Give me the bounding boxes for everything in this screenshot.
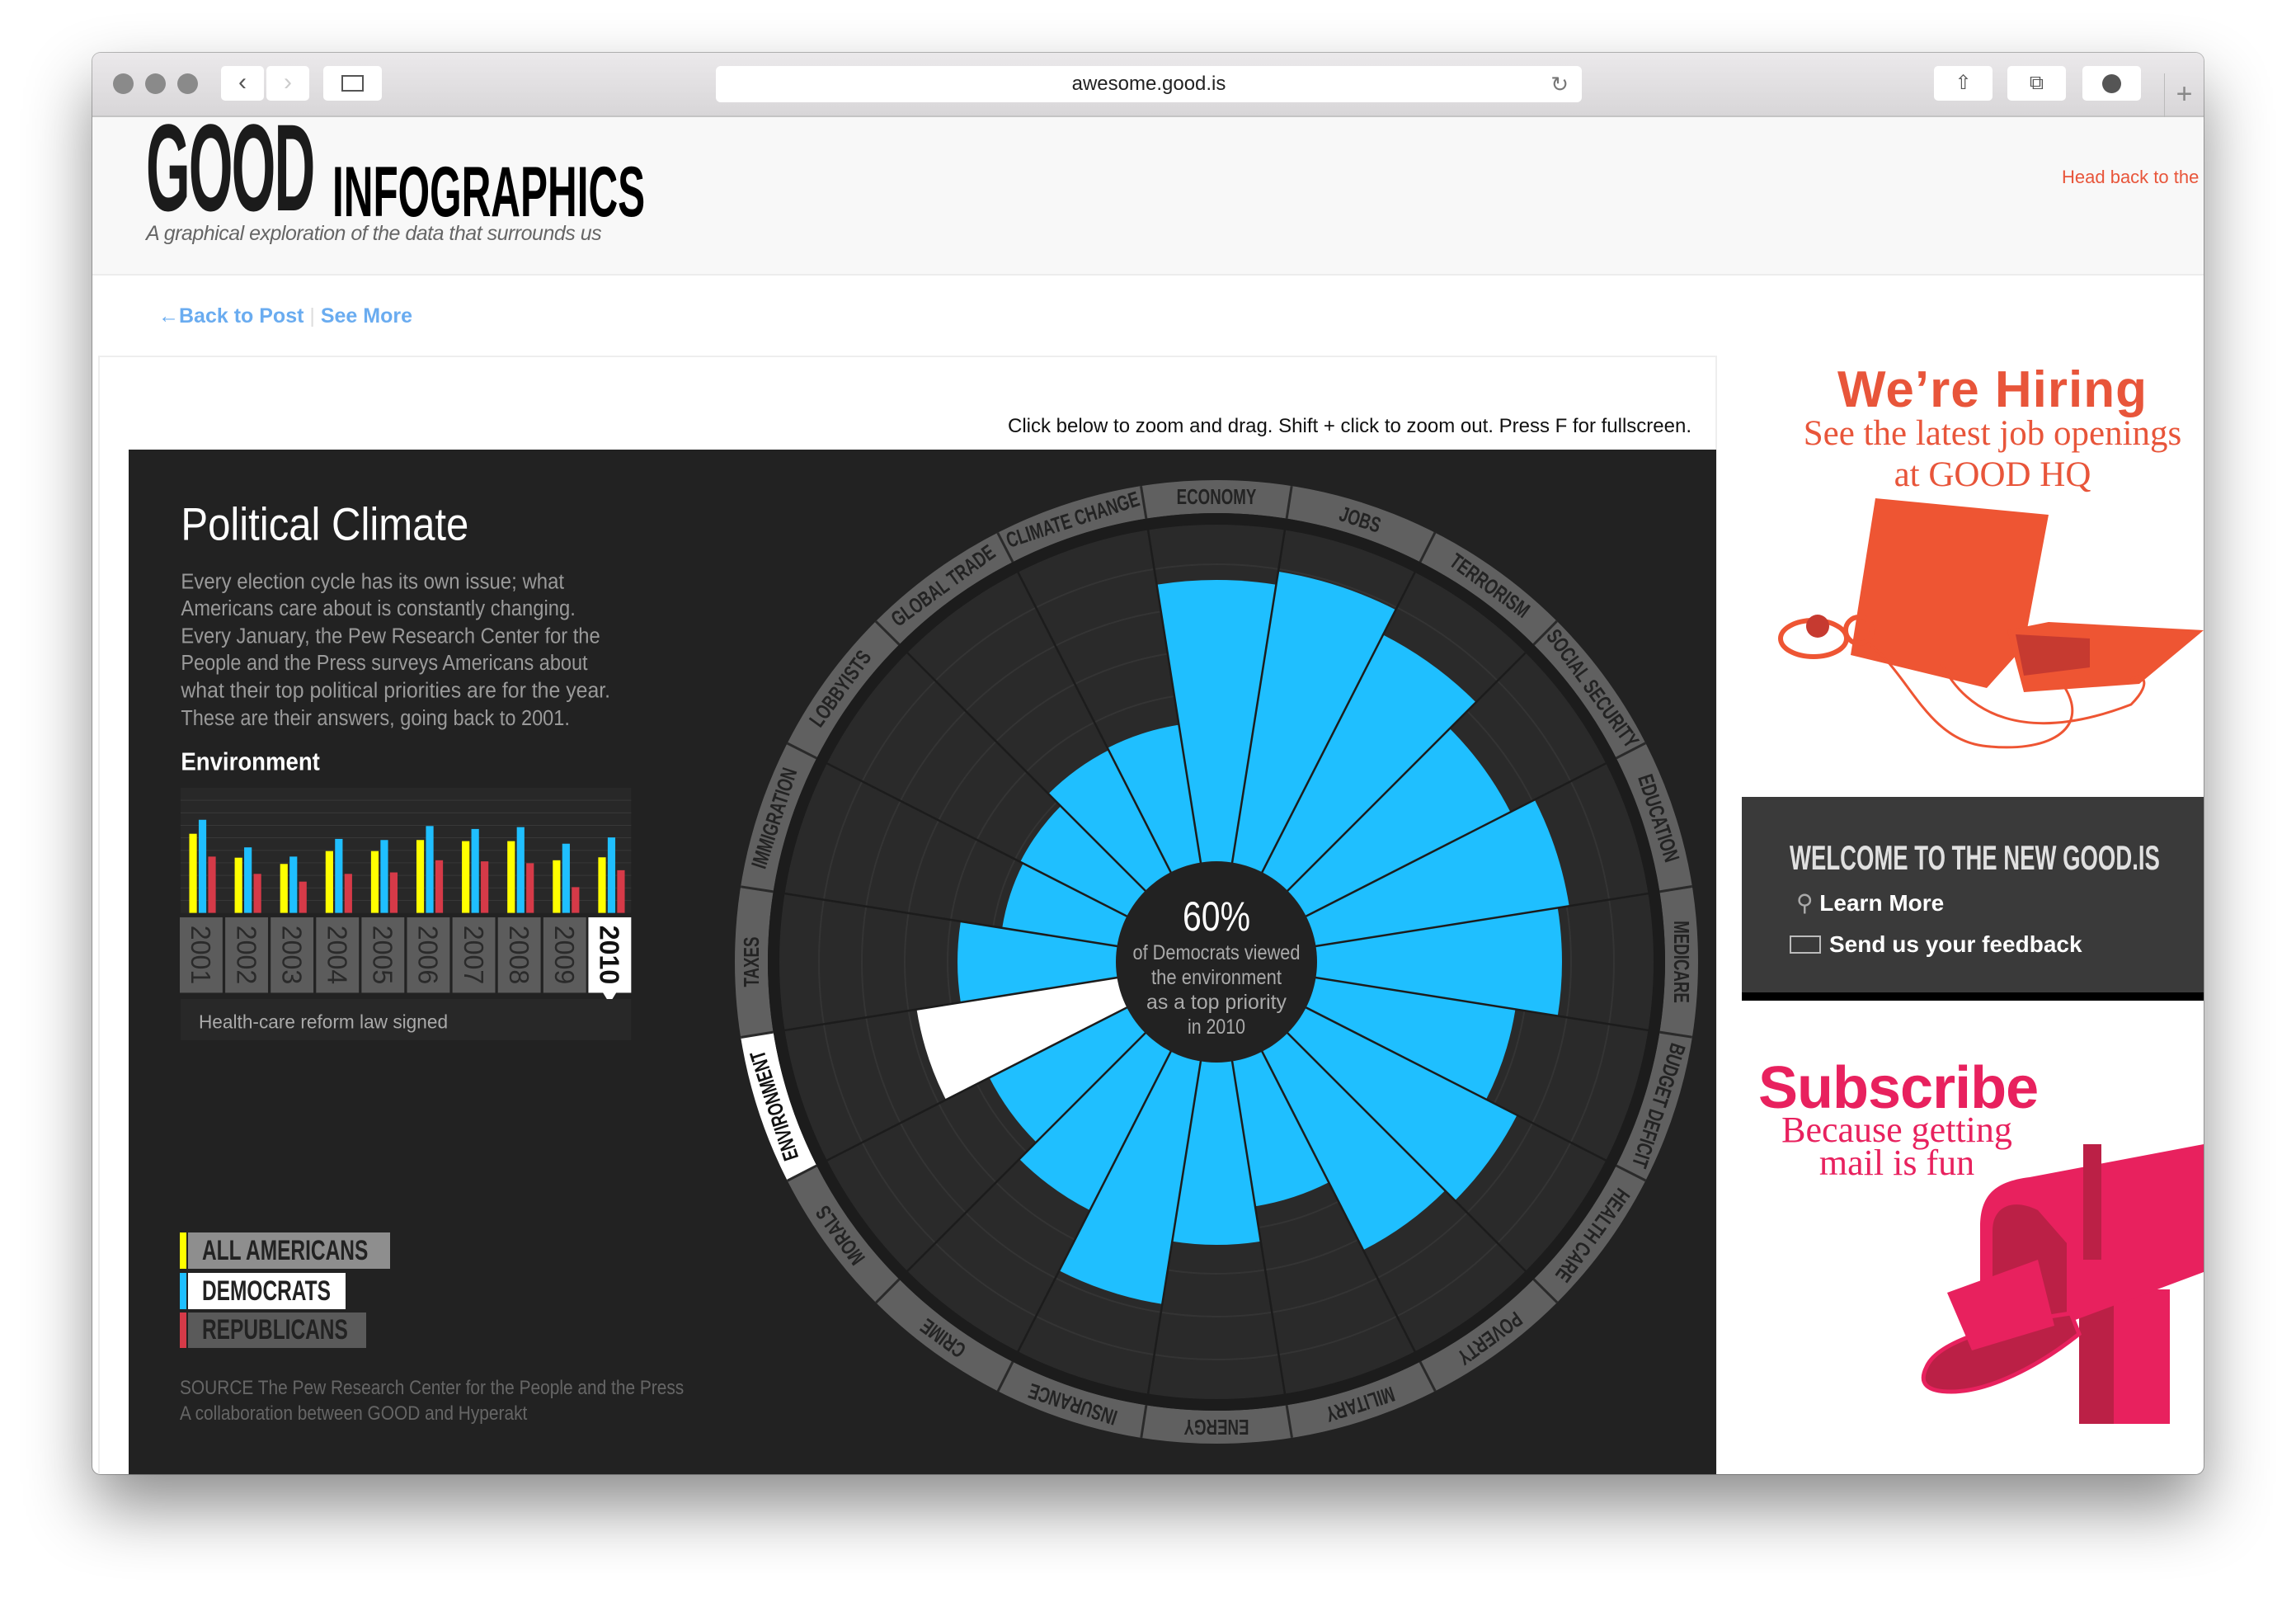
year tabs: 2009 (549, 926, 580, 984)
hiring heading: We’re Hiring (1837, 361, 2148, 418)
category labels: MILITARY (1323, 1382, 1398, 1427)
intro paragraph: what their top political priorities are for the year. (180, 678, 610, 703)
subscribe subtitle: Because getting (1781, 1110, 2012, 1150)
content frame (98, 356, 1717, 1510)
year tabs: 2005 (368, 926, 398, 984)
category labels: LOBBYISTS (804, 645, 876, 731)
legend: democrats (180, 1273, 346, 1309)
category labels: BUDGET DEFICIT (1627, 1040, 1691, 1171)
category labels (739, 484, 1694, 1440)
tagline: A graphical exploration of the data that surrounds us (146, 222, 601, 245)
category labels: TAXES (739, 937, 764, 987)
icon: back forward buttons: ‹ (238, 68, 247, 96)
left text and bar chart (180, 498, 632, 1033)
legend: republicans (180, 1312, 366, 1348)
sidebar: welcome box (1742, 797, 2204, 1001)
subscribe subtitle: mail is fun (1819, 1143, 1974, 1183)
icon: back forward buttons: › (284, 68, 292, 96)
instructions: Click below to zoom and drag. Shift + click to zoom out. Press F for fullscreen. (1008, 415, 1691, 437)
caption box: Health-care reform law signed (199, 1011, 448, 1033)
sidebar: hiring ad (1778, 361, 2204, 749)
welcome heading: WELCOME TO THE NEW GOOD.IS (1790, 838, 2160, 877)
year tabs: 2001 (186, 926, 217, 984)
toolbar right buttons: ⧉ (2030, 72, 2044, 94)
center callout: as a top priority (1146, 991, 1287, 1014)
icon: mailbox (1922, 1144, 2204, 1424)
category labels: ENERGY (1183, 1415, 1249, 1440)
intro paragraph: These are their answers, going back to 2001. (181, 705, 570, 730)
category labels: ENVIRONMENT (745, 1048, 803, 1164)
category labels: CLIMATE CHANGE (1003, 486, 1142, 553)
nav links: ←Back to Post | See More (158, 304, 412, 328)
year tabs: 2004 (322, 926, 353, 984)
polar bars (913, 567, 1574, 1308)
panel: infographic dark (129, 450, 1716, 1474)
learn more link: ⚲ Learn More (1796, 890, 1944, 916)
logo GOOD: GOOD (146, 98, 313, 237)
year tabs: 2010 (595, 926, 625, 984)
toolbar right buttons (1934, 66, 2141, 101)
intro paragraph: Americans care about is constantly changing. (181, 596, 576, 620)
url bar: ↻ (1550, 72, 1569, 97)
category labels: ECONOMY (1177, 484, 1256, 509)
hiring subtitle: at GOOD HQ (1894, 455, 2091, 494)
icon: traffic lights (113, 73, 198, 94)
category labels: CRIME (915, 1314, 971, 1363)
sidebar: subscribe ad (1758, 1055, 2204, 1424)
icon: back forward buttons (221, 66, 309, 101)
sector dividers (785, 530, 1648, 1394)
title: Political Climate (181, 498, 468, 549)
category labels: POVERTY (1453, 1307, 1527, 1370)
category labels: GLOBAL TRADE (887, 540, 1000, 631)
category labels: IMMIGRATION (746, 765, 802, 871)
year tabs: 2003 (276, 926, 308, 984)
legend: republicans: REPUBLICANS (202, 1314, 348, 1345)
center callout (1116, 861, 1317, 1063)
category labels: EDUCATION (1633, 771, 1685, 865)
label ring (735, 486, 1692, 1438)
caption box (181, 999, 631, 1040)
subheading environment: Environment (181, 747, 320, 775)
icon: sidebar button (323, 66, 382, 101)
hiring subtitle: See the latest job openings (1804, 414, 2181, 453)
category labels: TERRORISM (1445, 549, 1535, 623)
bar chart (181, 788, 631, 913)
center callout: in 2010 (1188, 1016, 1245, 1039)
logo INFOGRAPHICS: INFOGRAPHICS (332, 153, 645, 232)
center callout: 60% (1183, 893, 1250, 940)
category labels: HEALTH CARE (1550, 1184, 1635, 1287)
category labels: MEDICARE (1669, 921, 1694, 1003)
year tabs: 2006 (413, 926, 444, 984)
category labels: INSURANCE (1025, 1378, 1120, 1430)
icon: plus tab (2164, 73, 2204, 117)
center callout: of Democrats viewed (1133, 941, 1300, 964)
intro paragraph: Every election cycle has its own issue; what (181, 569, 565, 593)
chart background (768, 513, 1665, 1411)
year tabs: 2007 (459, 926, 489, 984)
subscribe subtitle (1781, 1110, 2012, 1183)
toolbar (92, 53, 2204, 117)
source text: A collaboration between GOOD and Hyperakt (180, 1402, 527, 1425)
category labels: SOCIAL SECURITY (1541, 624, 1644, 752)
source text: SOURCE The Pew Research Center for the People and the Press (180, 1377, 684, 1399)
category labels: MORALS (811, 1201, 869, 1270)
icon: laptop illustration (1778, 498, 2204, 749)
hiring subtitle (1804, 414, 2181, 494)
year tabs (180, 917, 631, 1003)
polar chart (735, 480, 1698, 1444)
legend: all americans (180, 1232, 390, 1269)
toolbar right buttons: ⇧ (1955, 72, 1972, 94)
legend: all americans: ALL AMERICANS (202, 1235, 368, 1266)
intro paragraph (180, 569, 610, 730)
category labels: JOBS (1337, 501, 1384, 537)
subscribe heading: Subscribe (1758, 1055, 2038, 1121)
year tabs: 2002 (231, 926, 262, 984)
head back link: Head back to the (2062, 167, 2199, 187)
year tabs: 2008 (504, 926, 534, 984)
center callout: the environment (1151, 966, 1282, 989)
intro paragraph: Every January, the Pew Research Center for the (181, 624, 600, 648)
feedback link: Send us your feedback (1829, 931, 2082, 957)
icon: plus tab: + (2176, 78, 2192, 110)
url bar (716, 66, 1582, 102)
intro paragraph: People and the Press surveys Americans about (181, 650, 588, 675)
header (92, 117, 2204, 276)
legend (180, 1232, 390, 1348)
source text (180, 1377, 684, 1425)
url bar: awesome.good.is (1072, 73, 1226, 95)
legend: democrats: DEMOCRATS (202, 1275, 331, 1307)
